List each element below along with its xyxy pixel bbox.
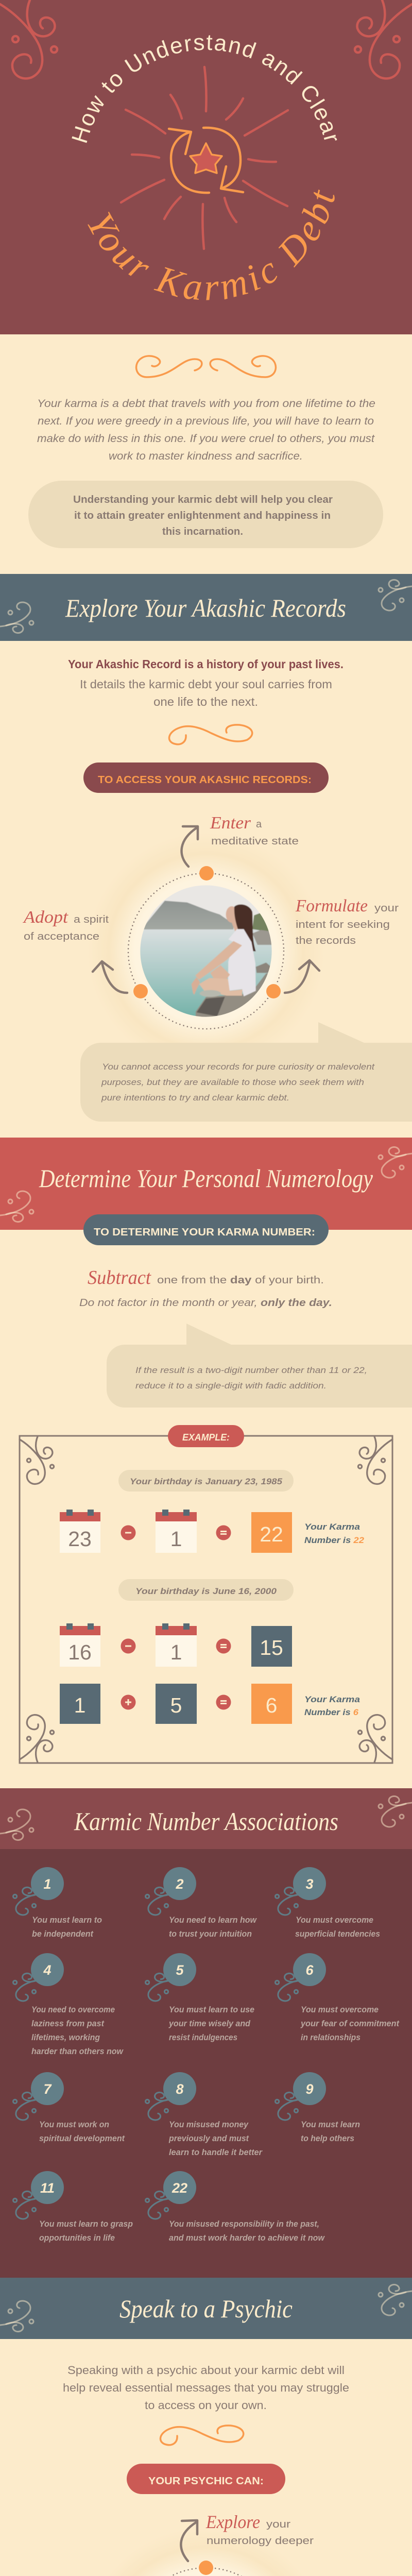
- pill: example: EXAMPLE:: [182, 1432, 230, 1443]
- calendar 23: [60, 1510, 100, 1553]
- minus sign: [121, 1638, 136, 1654]
- callout: understanding: Understanding your karmic debt will help you clear: [73, 494, 333, 505]
- box 1: [60, 1684, 100, 1724]
- item 6: You must overcome: [301, 2005, 379, 2014]
- icon: cycle arrows and star: [169, 128, 243, 193]
- item 1: You must learn to: [32, 1916, 102, 1925]
- label: karma number 22: [304, 1522, 365, 1545]
- step: formulate: your: [374, 903, 399, 914]
- panel: hero: [0, 0, 412, 334]
- label: karma number 6: Your Karma: [304, 1694, 360, 1704]
- item 8: [145, 2072, 263, 2157]
- label: karma number 22: Number is 22: [304, 1535, 365, 1545]
- callout: access note: [80, 1022, 412, 1122]
- arrow: to enter: [182, 826, 198, 867]
- panel: akashic header: [0, 574, 412, 641]
- result 6: 6: [266, 1693, 277, 1717]
- panel: psychic header: [0, 2278, 412, 2339]
- text: intro paragraph: [37, 398, 375, 462]
- box 5: 5: [170, 1693, 182, 1717]
- calendar 1: [156, 1623, 197, 1667]
- diagram: access steps: [23, 817, 399, 1043]
- text: subtract instruction: Do not factor in the month or year, only the day.: [79, 1297, 332, 1309]
- item 22: 22: [171, 2180, 187, 2196]
- box 1: 1: [74, 1693, 85, 1717]
- ornament: double swash: [136, 356, 276, 377]
- label: karma number 6: Number is 6: [304, 1707, 359, 1717]
- ornament: swash: [161, 2426, 244, 2445]
- item 4: You need to overcome: [31, 2005, 115, 2014]
- text: akashic intro: [68, 657, 344, 708]
- text: psychic intro: [63, 2364, 349, 2412]
- pill: to determine: [83, 1214, 329, 1245]
- item 6: 6: [305, 1962, 314, 1978]
- item 3: superficial tendencies: [295, 1929, 380, 1939]
- callout: understanding: [28, 481, 383, 548]
- equals sign: [216, 1695, 231, 1709]
- item 2: [145, 1867, 257, 1939]
- calendar 16: 16: [68, 1640, 92, 1664]
- item 9: to help others: [301, 2134, 354, 2143]
- step: explore: [205, 2512, 314, 2547]
- orange nodes: [133, 866, 281, 998]
- step: formulate: intent for seeking: [296, 919, 390, 930]
- text: akashic intro: Your Akashic Record is a history of your past lives.: [68, 657, 344, 671]
- item 2: You need to learn how: [169, 1916, 257, 1925]
- item 4: lifetimes, working: [31, 2033, 100, 2042]
- title: your karmic debt: Your Karmic Debt: [88, 190, 335, 300]
- item 7: 7: [43, 2081, 52, 2097]
- plus sign: [121, 1695, 136, 1709]
- title: how to understand and clear: How to Understand and Clear: [72, 35, 337, 143]
- item 5: 5: [176, 1962, 184, 1978]
- item 11: [13, 2171, 133, 2243]
- item 1: [13, 1867, 102, 1939]
- item 22: You misused responsibility in the past,: [169, 2219, 319, 2229]
- dotted ring: [128, 2568, 284, 2576]
- step: adopt: a spirit: [74, 914, 109, 925]
- pill: birthday one: [118, 1470, 294, 1492]
- text: psychic intro: help reveal essential messages that you may struggle: [63, 2381, 349, 2394]
- heading: Explore Your Akashic Records: [65, 594, 346, 622]
- item 8: 8: [176, 2081, 184, 2097]
- swirls: [0, 1796, 412, 1840]
- item 2: 2: [175, 1876, 184, 1892]
- step: enter: [210, 814, 299, 847]
- step: formulate: [295, 896, 399, 946]
- item 4: laziness from past: [31, 2019, 105, 2028]
- pill: birthday one: Your birthday is January 23, 1985: [130, 1477, 283, 1486]
- item 3: 3: [305, 1876, 314, 1892]
- item 4: [13, 1953, 124, 2056]
- calendar 1: 1: [170, 1527, 182, 1551]
- item 11: You must learn to grasp: [39, 2219, 133, 2229]
- step: explore: Explore: [205, 2512, 260, 2532]
- pill: to access: [83, 762, 329, 793]
- pill: to access: TO ACCESS YOUR AKASHIC RECORDS:: [98, 774, 312, 786]
- item 6: in relationships: [301, 2033, 360, 2042]
- pill: birthday two: [118, 1579, 294, 1601]
- item 1: be independent: [32, 1929, 94, 1939]
- item 1: 1: [43, 1876, 52, 1892]
- callout: access note: You cannot access your records for pure curiosity or malevolent: [102, 1062, 375, 1072]
- step: enter: Enter: [210, 814, 251, 833]
- text: intro paragraph: make do with less in this one. If you were cruel to others, you must: [37, 433, 375, 445]
- result 22: [251, 1512, 292, 1553]
- panel: intro: [28, 356, 383, 548]
- item 9: [275, 2072, 360, 2143]
- calendar 16: [60, 1623, 100, 1667]
- item 7: You must work on: [39, 2120, 109, 2129]
- callout: two-digit note: reduce it to a single-digit with fadic addition.: [135, 1381, 327, 1391]
- panel: karmic number associations: [0, 1788, 412, 2278]
- calendar 23: 23: [68, 1527, 92, 1551]
- item 22: [145, 2171, 325, 2243]
- swirls: [0, 1147, 412, 1222]
- text: subtract instruction: Subtract: [88, 1267, 151, 1289]
- item 3: [275, 1867, 380, 1939]
- text: intro paragraph: Your karma is a debt that travels with you from one lifetime to the: [37, 398, 375, 410]
- item 11: 11: [40, 2180, 55, 2196]
- pill: birthday two: Your birthday is June 16, 2000: [135, 1586, 277, 1596]
- text: akashic intro: It details the karmic debt your soul carries from: [80, 677, 332, 691]
- item 8: learn to handle it better: [169, 2148, 263, 2157]
- step: enter: a: [256, 819, 262, 830]
- step: formulate: the records: [296, 935, 356, 946]
- text: intro paragraph: work to master kindness and sacrifice.: [109, 450, 303, 462]
- corner swirl left: [0, 0, 57, 78]
- result 22: 22: [260, 1522, 283, 1546]
- pill: your psychic can: [127, 2464, 285, 2494]
- heading: Speak to a Psychic: [119, 2294, 293, 2323]
- pill: example: [168, 1425, 244, 1447]
- item 8: You misused money: [169, 2120, 249, 2129]
- photo: meditating woman: [139, 885, 273, 1021]
- text: psychic intro: to access on your own.: [145, 2399, 267, 2412]
- item 7: spiritual development: [39, 2134, 125, 2143]
- calendar 1: [156, 1510, 197, 1553]
- item 6: [275, 1953, 400, 2042]
- item 5: You must learn to use: [169, 2005, 254, 2014]
- step: adopt: of acceptance: [24, 931, 99, 942]
- swirls: [0, 2284, 412, 2332]
- item 22: and must work harder to achieve it now: [169, 2233, 325, 2243]
- item 4: harder than others now: [31, 2047, 124, 2056]
- text: intro paragraph: next. If you were greedy in a previous life, you will have to learn to: [38, 415, 374, 427]
- calendar 1: 1: [170, 1640, 182, 1664]
- item 3: You must overcome: [296, 1916, 373, 1925]
- callout: access note: pure intentions to try and clear karmic debt.: [101, 1093, 289, 1103]
- arrow: to adopt: [93, 961, 127, 993]
- dotted ring: [128, 873, 284, 1029]
- item 8: previously and must: [168, 2134, 249, 2143]
- step: explore: your: [266, 2519, 290, 2530]
- text: akashic intro: one life to the next.: [153, 695, 258, 708]
- equals sign: [216, 1525, 231, 1540]
- step: formulate: Formulate: [295, 896, 368, 916]
- swirls: [0, 580, 412, 633]
- diagram: psychic abilities: [133, 2515, 314, 2576]
- box 5: [156, 1684, 197, 1724]
- step: adopt: Adopt: [23, 908, 69, 927]
- item 4: 4: [43, 1962, 52, 1978]
- frame corner swirls: [20, 1437, 392, 1762]
- callout: access note: purposes, but they are available to those who seek them with: [101, 1077, 364, 1087]
- callout: understanding: it to attain greater enlightenment and happiness in: [74, 510, 331, 521]
- minus sign: [121, 1525, 136, 1540]
- item 6: your fear of commitment: [300, 2019, 400, 2028]
- pill: to determine: TO DETERMINE YOUR KARMA NUMBER:: [94, 1227, 315, 1238]
- item 9: 9: [305, 2081, 314, 2097]
- orange nodes: [133, 2561, 280, 2576]
- text: subtract instruction: one from the day of your birth.: [157, 1275, 324, 1286]
- arrow: to formulate: [285, 960, 319, 993]
- item 5: [145, 1953, 254, 2042]
- result 6: [251, 1684, 292, 1724]
- label: karma number 22: Your Karma: [304, 1522, 360, 1532]
- corner swirl right: [355, 0, 412, 78]
- panel: example frame: [20, 1425, 392, 1763]
- callout: understanding: this incarnation.: [162, 526, 243, 537]
- item 9: You must learn: [301, 2120, 360, 2129]
- item 7: [13, 2072, 125, 2143]
- heading: Karmic Number Associations: [74, 1807, 338, 1836]
- item 5: resist indulgences: [169, 2033, 237, 2042]
- result 15: 15: [260, 1636, 283, 1659]
- icon: sun rays: [121, 67, 288, 249]
- item 11: opportunities in life: [39, 2233, 115, 2243]
- callout: two-digit note: [107, 1324, 412, 1408]
- arrow: to explore: [181, 2520, 197, 2561]
- result 15: [251, 1626, 292, 1667]
- callout: two-digit note: If the result is a two-digit number other than 11 or 22,: [135, 1365, 367, 1375]
- ornament: swash: [169, 725, 252, 744]
- text: subtract instruction: [79, 1267, 332, 1309]
- panel: numerology header: [0, 1138, 412, 1230]
- text: psychic intro: Speaking with a psychic about your karmic debt will: [67, 2364, 345, 2377]
- item 5: your time wisely and: [168, 2019, 251, 2028]
- step: explore: numerology deeper: [207, 2535, 314, 2547]
- pill: your psychic can: YOUR PSYCHIC CAN:: [148, 2476, 264, 2487]
- step: enter: meditative state: [211, 836, 299, 847]
- equals sign: [216, 1638, 231, 1654]
- label: karma number 6: [304, 1694, 360, 1717]
- step: adopt: [23, 908, 109, 942]
- item 2: to trust your intuition: [169, 1929, 252, 1939]
